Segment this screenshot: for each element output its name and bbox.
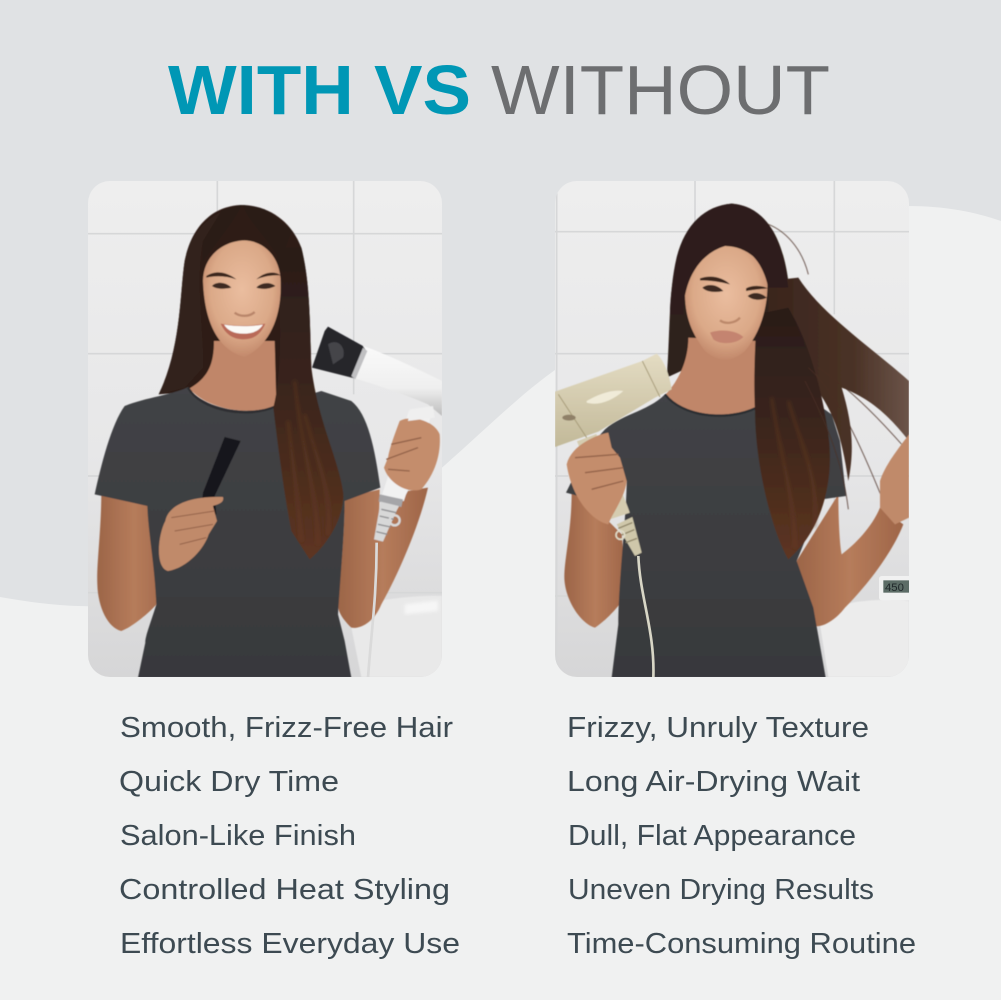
dryer collar bbox=[351, 348, 367, 379]
drawbacks list: without: Dull, Flat Appearance bbox=[568, 820, 856, 852]
comb bbox=[202, 437, 240, 514]
cord strain relief bbox=[617, 517, 642, 556]
title bbox=[168, 51, 830, 129]
eyebrows bbox=[206, 272, 281, 279]
eyes bbox=[212, 283, 275, 289]
hair front strand bbox=[273, 248, 343, 559]
nose bbox=[235, 312, 255, 316]
hair falling strand bbox=[754, 308, 830, 559]
digital timer bbox=[879, 576, 909, 600]
drawbacks list: without bbox=[567, 712, 916, 960]
nose bbox=[720, 318, 740, 323]
panel: with photo bbox=[88, 181, 442, 678]
hair crown bbox=[670, 204, 788, 314]
neck bbox=[190, 341, 276, 411]
dryer neck bbox=[408, 406, 435, 421]
hand: right bbox=[880, 434, 909, 524]
drawbacks list: without: Frizzy, Unruly Texture bbox=[567, 712, 869, 744]
title: WITH VS bbox=[168, 51, 471, 129]
dryer handle bbox=[393, 414, 420, 498]
benefits list: with: Effortless Everyday Use bbox=[120, 928, 460, 960]
dryer cord bbox=[638, 556, 653, 678]
frown mouth bbox=[710, 331, 743, 343]
benefits list: with: Salon-Like Finish bbox=[120, 820, 356, 852]
cord loop bbox=[616, 531, 625, 539]
title: WITHOUT bbox=[491, 51, 830, 129]
hair parting bbox=[240, 206, 244, 207]
hair strand highlights bbox=[772, 398, 815, 548]
background wave bbox=[0, 206, 1001, 1000]
hair blown strand bbox=[768, 278, 909, 481]
hand: left holding dryer bbox=[567, 433, 627, 524]
dryer body bbox=[555, 354, 672, 447]
face bbox=[685, 246, 767, 360]
arm: left bbox=[564, 491, 627, 628]
drawbacks list: without: Uneven Drying Results bbox=[568, 874, 874, 906]
hair strand highlights bbox=[286, 382, 328, 496]
dryer cord bbox=[368, 543, 377, 678]
benefits list: with: Controlled Heat Styling bbox=[119, 874, 450, 906]
drawbacks list: without: Time-Consuming Routine bbox=[567, 928, 916, 960]
benefits list: with bbox=[119, 712, 460, 960]
dryer body bbox=[355, 346, 442, 416]
drawbacks list: without: Long Air-Drying Wait bbox=[567, 766, 860, 798]
panel: without photo bbox=[555, 181, 916, 678]
hair left side bbox=[158, 258, 186, 394]
hair back bbox=[666, 203, 789, 377]
arm: right bbox=[797, 494, 903, 626]
arm: right bbox=[338, 488, 428, 628]
benefits list: with: Quick Dry Time bbox=[119, 766, 339, 798]
dryer nozzle bbox=[312, 327, 366, 378]
t-shirt bbox=[566, 394, 846, 678]
dryer handle bbox=[587, 438, 620, 516]
benefits list: with: Smooth, Frizz-Free Hair bbox=[120, 712, 453, 744]
digital timer: 450 bbox=[885, 582, 904, 594]
hand: left holding comb bbox=[159, 497, 223, 571]
cord loop bbox=[390, 515, 400, 525]
neck bbox=[666, 338, 758, 414]
smile bbox=[221, 324, 265, 339]
face bbox=[203, 240, 281, 357]
hair back bbox=[159, 205, 311, 414]
dryer grip base bbox=[379, 494, 403, 507]
eyebrows bbox=[700, 277, 768, 291]
cord strain relief bbox=[374, 502, 399, 542]
sink bbox=[818, 600, 909, 677]
arm: left bbox=[97, 491, 171, 631]
t-shirt bbox=[95, 387, 380, 678]
hair flyaway strands bbox=[768, 224, 902, 509]
hand: right holding dryer bbox=[384, 418, 440, 490]
eyes bbox=[702, 285, 767, 300]
